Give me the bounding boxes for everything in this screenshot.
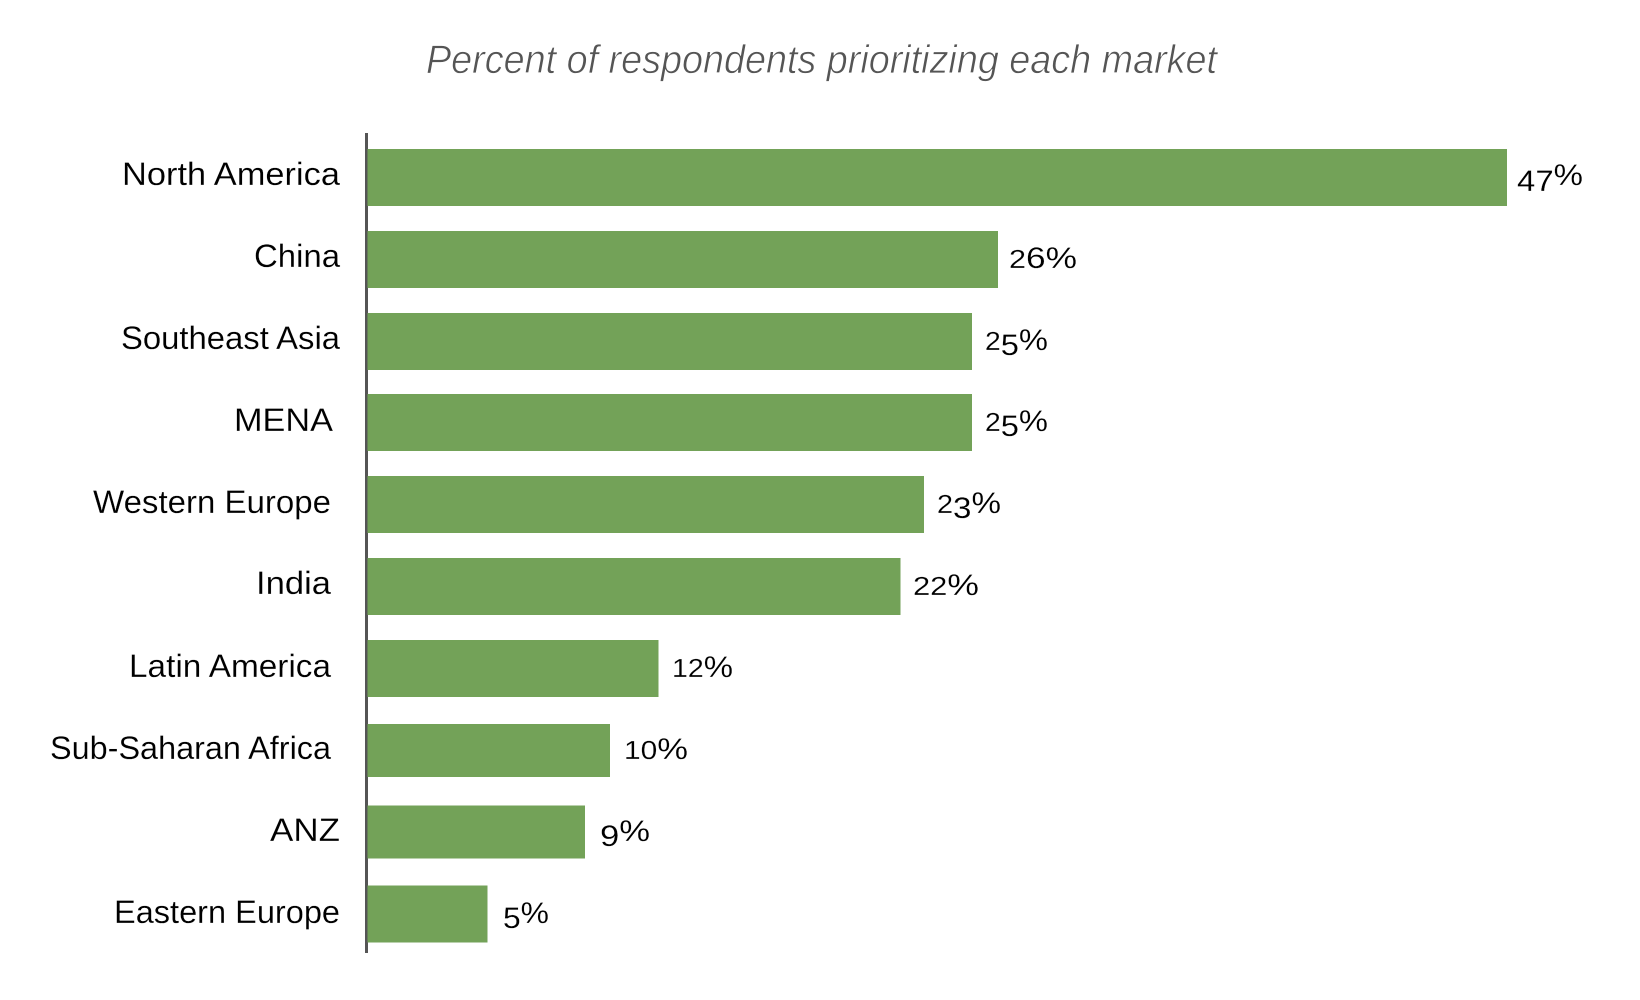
title: Percent of respondents prioritizing each market bbox=[426, 38, 1219, 82]
row: Western Europe: 3 bbox=[953, 492, 971, 525]
row: Eastern Europe: Eastern Europe bbox=[114, 894, 340, 930]
row: Western Europe: Western Europe bbox=[93, 484, 331, 520]
row: MENA bbox=[234, 394, 1048, 451]
row: North America: % bbox=[1554, 159, 1583, 192]
row: China bbox=[254, 231, 1077, 288]
row: Sub-Saharan Africa bbox=[50, 724, 688, 777]
row: North America: 47 bbox=[1517, 165, 1554, 198]
row: Southeast Asia: 2 bbox=[985, 326, 1001, 356]
row: Latin America: 12% bbox=[672, 651, 733, 684]
row: ANZ: % bbox=[619, 815, 650, 848]
row: Latin America bbox=[129, 640, 733, 697]
row: ANZ bbox=[270, 806, 650, 858]
row: Southeast Asia: Southeast Asia bbox=[121, 320, 340, 356]
row: Eastern Europe: % bbox=[521, 897, 549, 930]
row: India bbox=[256, 558, 979, 615]
row: Western Europe: % bbox=[971, 487, 1001, 520]
row: ANZ: 9 bbox=[600, 820, 619, 853]
row: India: India bbox=[256, 565, 331, 601]
row: MENA: 5 bbox=[1001, 410, 1019, 443]
row: Western Europe: 2 bbox=[937, 489, 953, 519]
row: Sub-Saharan Africa: Sub-Saharan Africa bbox=[50, 730, 331, 766]
row: Southeast Asia: % bbox=[1019, 324, 1048, 357]
row: Eastern Europe: 5 bbox=[503, 902, 521, 935]
row: Southeast Asia: 5 bbox=[1001, 329, 1019, 362]
row: North America bbox=[122, 149, 1583, 206]
row: Eastern Europe bbox=[114, 886, 549, 942]
row: Southeast Asia bbox=[121, 313, 1048, 370]
row: Western Europe bbox=[93, 476, 1001, 533]
row: MENA: 2 bbox=[985, 407, 1001, 437]
row: Sub-Saharan Africa: 10% bbox=[624, 733, 688, 766]
row: India: 22% bbox=[913, 569, 979, 602]
row: ANZ: ANZ bbox=[270, 812, 340, 848]
vertical axis bbox=[365, 133, 368, 953]
row: China: 26% bbox=[1009, 242, 1077, 275]
row: North America: North America bbox=[122, 156, 340, 192]
row: MENA: MENA bbox=[234, 402, 334, 438]
row: China: China bbox=[254, 238, 340, 274]
row: Latin America: Latin America bbox=[129, 648, 331, 684]
row: MENA: % bbox=[1019, 405, 1048, 438]
